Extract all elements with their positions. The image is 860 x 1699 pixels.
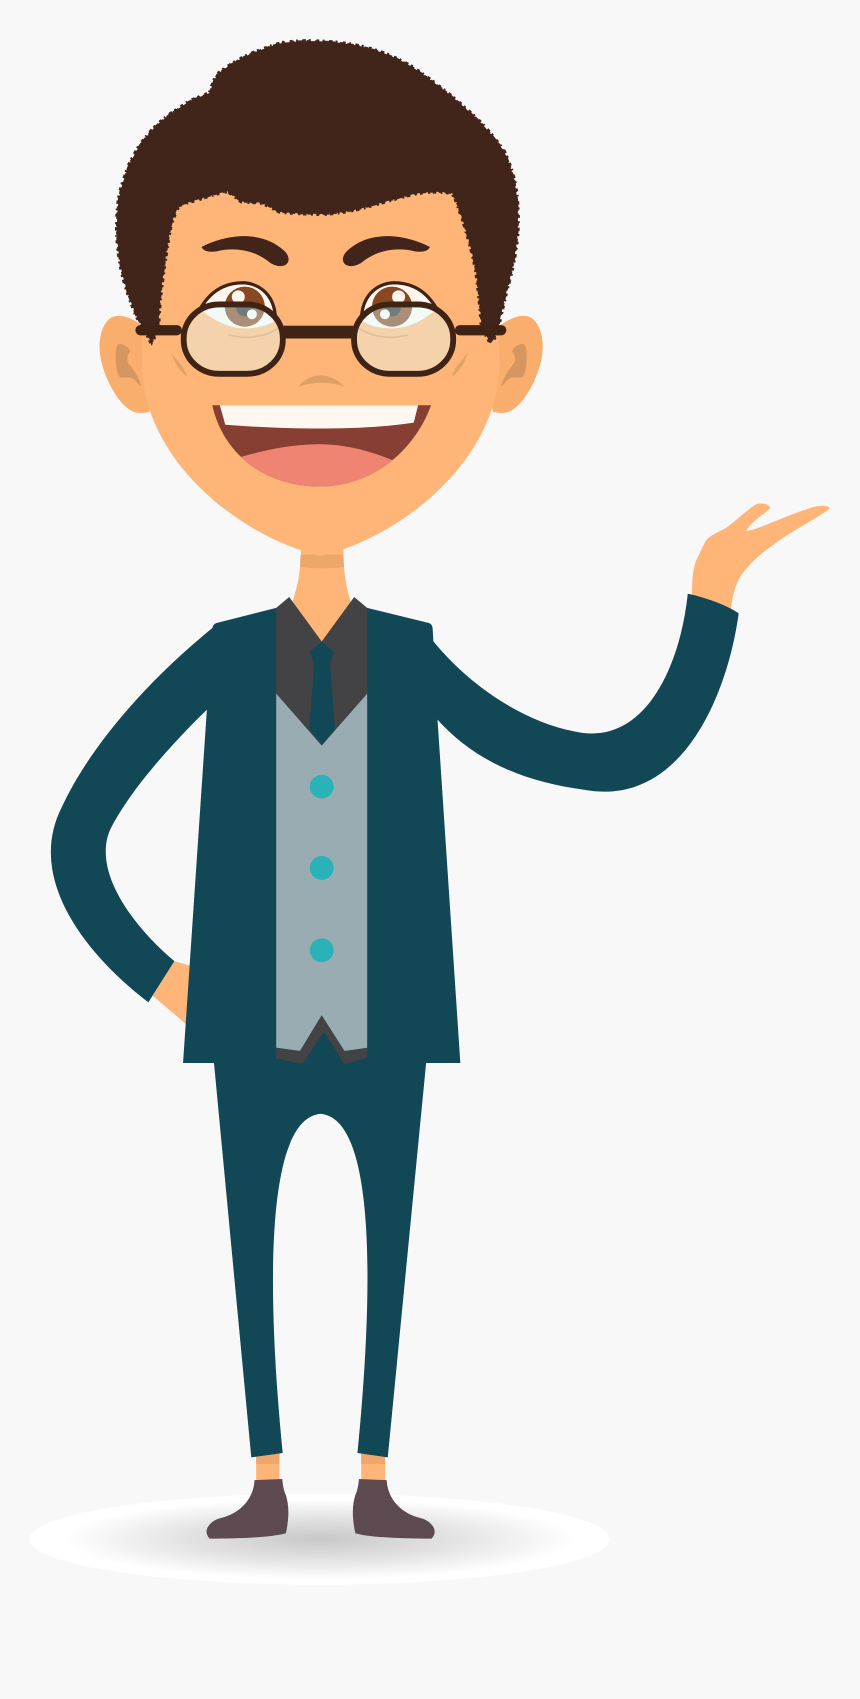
hair <box>117 42 517 342</box>
right ankle shadow <box>361 1452 385 1464</box>
button 3 <box>310 938 334 962</box>
right ear <box>480 316 543 413</box>
tongue <box>241 444 392 486</box>
button 1 <box>310 775 334 799</box>
right eye and glasses lens <box>351 283 453 374</box>
tie <box>309 641 335 745</box>
ground shadow <box>29 1494 610 1585</box>
glasses bridge <box>284 326 353 338</box>
ankles and shoes <box>207 1452 435 1539</box>
nose <box>298 375 344 387</box>
face <box>142 184 499 556</box>
jacket <box>183 608 460 1063</box>
left ear <box>100 316 162 413</box>
raised arm sleeve <box>430 594 739 792</box>
left ankle <box>256 1452 279 1484</box>
left cheek mark <box>171 352 187 377</box>
mouth <box>212 405 431 487</box>
right cheek mark <box>452 352 468 377</box>
left eye and glasses lens <box>184 283 286 374</box>
button 2 <box>310 856 334 880</box>
right eyebrow <box>343 236 430 266</box>
right temple <box>455 325 506 335</box>
left temple <box>135 325 182 335</box>
neck <box>292 547 351 646</box>
trousers <box>213 1056 427 1457</box>
waistcoat <box>276 693 367 1051</box>
bent arm sleeve <box>51 626 214 1002</box>
left eyebrow <box>201 236 289 266</box>
hand behind the back <box>153 961 193 1026</box>
right shoe <box>353 1479 435 1539</box>
shirt collar <box>276 597 367 745</box>
left shoe <box>207 1479 288 1539</box>
neck shadow <box>300 555 344 568</box>
teeth <box>220 405 418 429</box>
right ankle <box>361 1452 385 1484</box>
left ankle shadow <box>256 1452 279 1464</box>
raised hand <box>692 504 830 612</box>
waistcoat hem <box>276 1015 367 1064</box>
